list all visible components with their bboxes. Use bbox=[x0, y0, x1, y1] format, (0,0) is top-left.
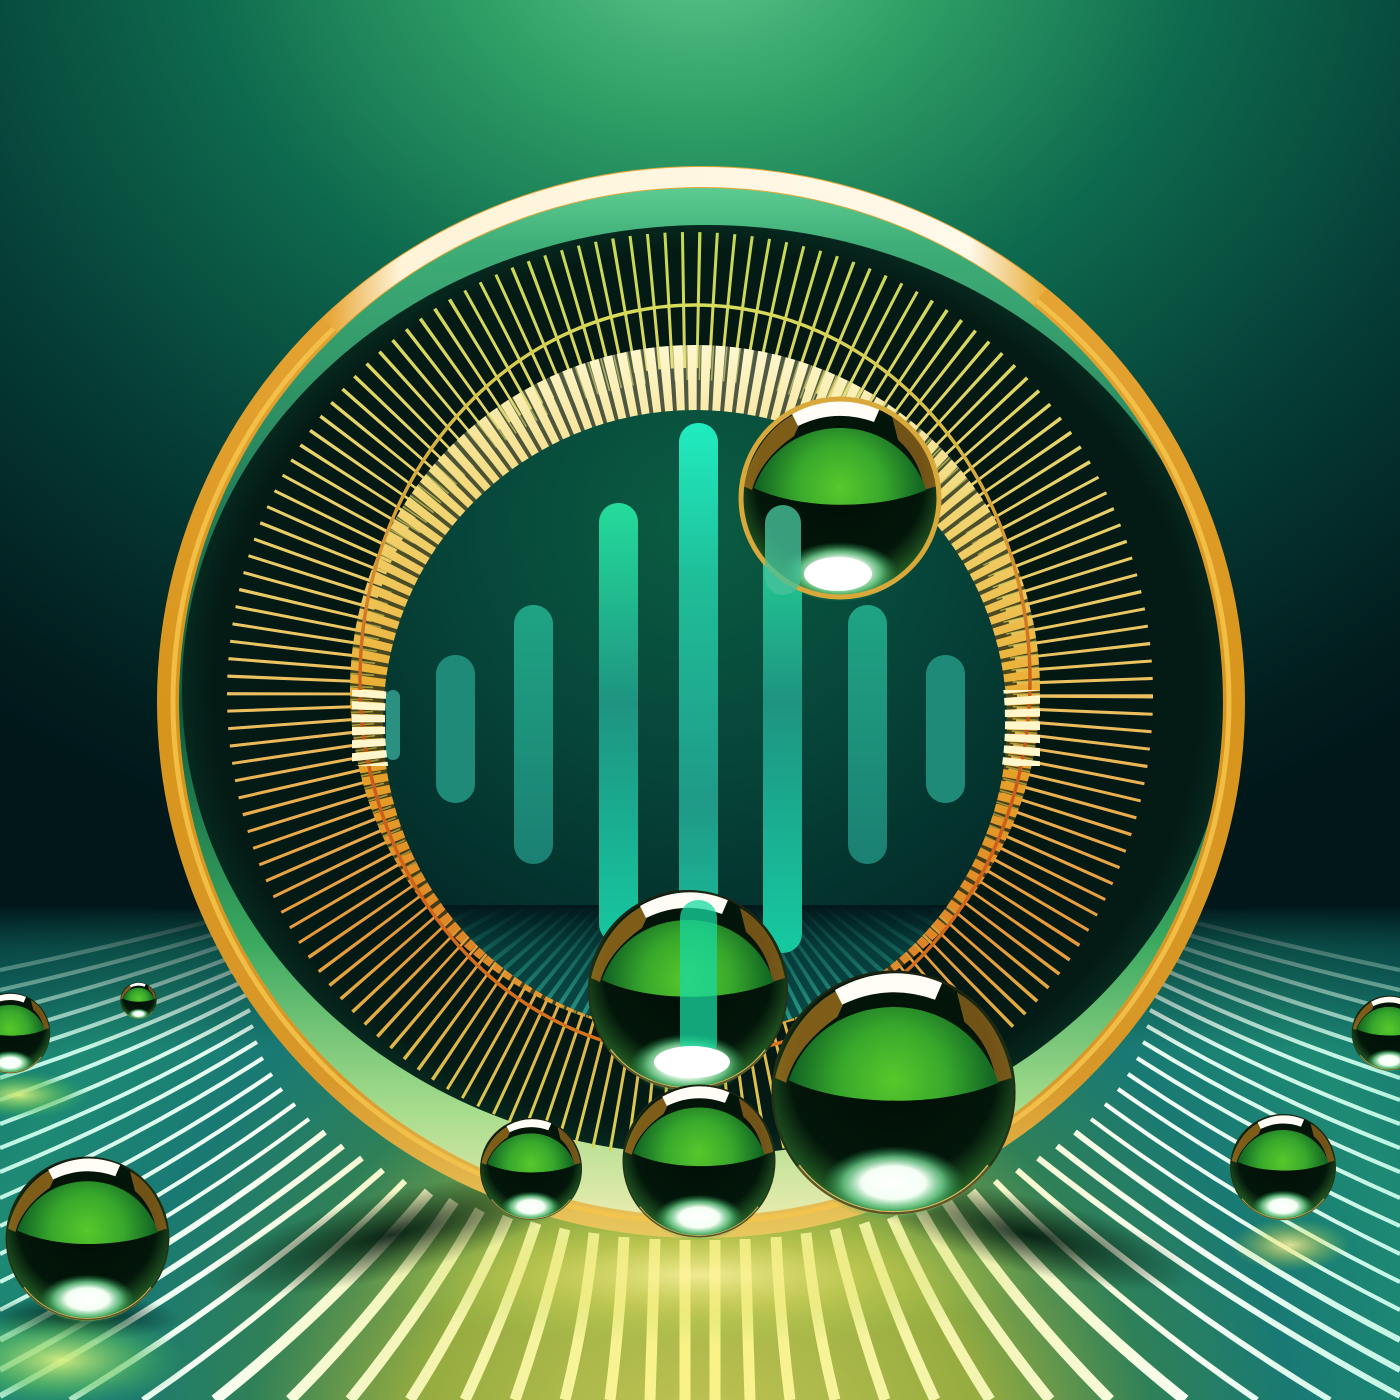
bar 1 (partial) bbox=[386, 690, 400, 760]
ring line bbox=[360, 305, 1030, 1055]
bar seen through centre droplet bbox=[680, 900, 717, 1060]
droplet: lower small left bbox=[480, 1118, 582, 1222]
bar 2 bbox=[436, 655, 475, 803]
bar 6 bbox=[763, 503, 802, 953]
droplet: lower middle bbox=[623, 1085, 775, 1241]
bar 4 bbox=[599, 503, 638, 943]
lower cream inner rim bbox=[232, 950, 1010, 1227]
reflection under right droplet bbox=[1230, 1219, 1350, 1271]
sphere rim bbox=[168, 177, 1234, 1227]
horizon darkening bbox=[0, 905, 1400, 1050]
droplet: centre bbox=[588, 890, 788, 1094]
droplet: left edge bbox=[0, 993, 50, 1075]
glass sphere bbox=[168, 177, 1234, 1227]
floor seen through the disc bbox=[442, 905, 948, 1022]
centre droplet glow bbox=[654, 1046, 730, 1078]
bar 3 bbox=[514, 605, 553, 864]
floor glow beneath sphere bbox=[360, 1205, 1040, 1345]
bar 8 bbox=[926, 655, 965, 803]
rim inner highlight bbox=[173, 182, 1229, 1222]
droplet: on upper ring bbox=[740, 398, 940, 602]
bar 7 bbox=[848, 605, 887, 864]
reflection under left droplet bbox=[0, 1310, 190, 1400]
hot glowing ticks bbox=[352, 690, 1040, 766]
inner disc bbox=[383, 410, 1007, 1034]
dark interior bbox=[182, 225, 1230, 1155]
droplet: floor right bbox=[1230, 1114, 1336, 1222]
droplet: floor left large bbox=[6, 1157, 169, 1324]
mesh band bbox=[333, 340, 1053, 1060]
reflection under edge droplet bbox=[0, 1071, 90, 1119]
droplet glow bbox=[804, 557, 872, 591]
radial thin ticks bbox=[295, 300, 1085, 1090]
droplet: tiny left bbox=[120, 982, 157, 1019]
sound wave bars bbox=[386, 423, 965, 1063]
floor shadows bbox=[0, 1148, 1204, 1342]
sphere base tint bbox=[168, 177, 1234, 1227]
background gradient bbox=[0, 0, 1400, 910]
droplet: largest bbox=[771, 970, 1016, 1219]
floor stripes right bbox=[715, 899, 1400, 1400]
top white highlight arc bbox=[330, 177, 1040, 325]
floor stripes left bbox=[0, 899, 685, 1400]
bar 5 bbox=[679, 423, 718, 1063]
striped floor bbox=[0, 899, 1400, 1400]
thick inner ticks bbox=[340, 367, 1050, 1077]
bar seen through droplet bbox=[765, 505, 801, 595]
droplet: right edge bbox=[1352, 996, 1400, 1072]
